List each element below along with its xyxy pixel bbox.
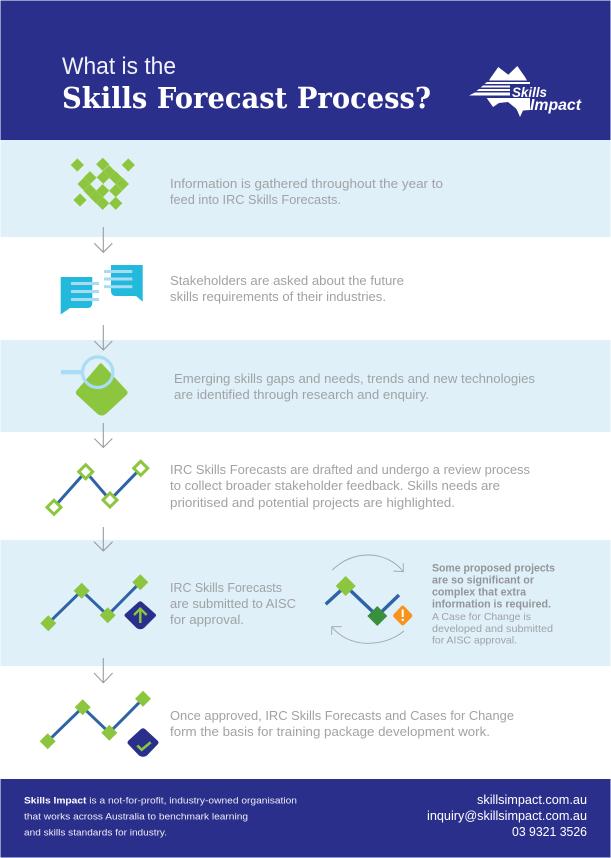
text: case for change callout: developed and submitted (432, 623, 553, 635)
text: contact details (427, 792, 587, 839)
text: about Skills Impact: and skills standards for industry. (24, 828, 167, 838)
icon: scattered diamonds (71, 158, 135, 210)
icon: line chart with submit badge (40, 574, 156, 631)
icon: speech bubbles (61, 265, 143, 314)
arrow: step 3 to 4 (94, 423, 112, 448)
text: case for change callout: A Case for Change is (432, 611, 531, 623)
text: about Skills Impact: Skills Impact is a not-for-profit, industry-owned organisation (24, 796, 297, 806)
text: contact details: 03 9321 3526 (512, 824, 587, 839)
text: step 1: Information is gathered throughout the year to (170, 176, 443, 191)
text: step 5: for approval. (170, 612, 244, 627)
text: step 6: form the basis for training package development work. (170, 724, 490, 739)
title: Skills Forecast Process? (62, 81, 431, 115)
text: case for change callout: information is required. (432, 598, 551, 610)
panel: step 3 band (0, 340, 610, 432)
logo: Skills Impact: Impact (530, 97, 582, 114)
text: case for change callout: complex that extra (432, 586, 527, 598)
logo: Skills Impact: Skills (512, 84, 547, 100)
text: case for change callout: Some proposed projects (432, 562, 555, 574)
panel: step 5 band (0, 540, 610, 666)
text: case for change callout: are so significant or (432, 574, 535, 586)
text: step 1 (170, 176, 443, 207)
text: step 4: prioritised and potential projects are highlighted. (170, 495, 455, 510)
text: step 3: are identified through research and enquiry. (174, 387, 429, 402)
text: step 6: Once approved, IRC Skills Forecasts and Cases for Change (170, 708, 514, 723)
icon: magnified diamond (61, 357, 128, 416)
title (62, 53, 431, 115)
text: step 3 (174, 371, 536, 402)
icon: case for change cycle (326, 555, 412, 643)
title: What is the (62, 53, 176, 80)
panel: header (0, 0, 610, 140)
text: about Skills Impact: that works across Australia to benchmark learning (24, 812, 248, 822)
text: step 4 (170, 462, 530, 510)
text: step 2: skills requirements of their industries. (170, 289, 386, 304)
icon: line chart with approved badge (40, 691, 159, 757)
text: step 5: IRC Skills Forecasts (170, 580, 282, 595)
text: step 6 (170, 708, 514, 739)
arrow: step 1 to 2 (94, 227, 112, 252)
arrow: step 2 to 3 (94, 325, 112, 350)
text: case for change callout: for AISC approval. (432, 634, 517, 646)
arrow: step 4 to 5 (94, 527, 113, 551)
text: step 4: to collect broader stakeholder feedback. Skills needs are (170, 478, 500, 493)
text: step 4: IRC Skills Forecasts are drafted and undergo a review process (170, 462, 530, 477)
text: step 3: Emerging skills gaps and needs, trends and new technologies (174, 371, 536, 386)
text: contact details: skillsimpact.com.au (477, 792, 587, 807)
text: about Skills Impact (24, 796, 297, 838)
text: step 2: Stakeholders are asked about the future (170, 273, 404, 288)
text: step 5 (170, 580, 296, 627)
logo: Skills Impact (469, 66, 582, 117)
text: step 1: feed into IRC Skills Forecasts. (170, 192, 341, 207)
text: step 2 (170, 273, 404, 304)
panel: step 1 band (0, 140, 610, 237)
text: contact details: inquiry@skillsimpact.com.au (427, 808, 587, 823)
text: case for change callout (432, 562, 555, 646)
arrow: step 5 to 6 (94, 658, 113, 683)
icon: line chart with outlined diamonds (47, 461, 148, 514)
text: step 5: are submitted to AISC (170, 596, 296, 611)
panel: footer (0, 779, 610, 858)
